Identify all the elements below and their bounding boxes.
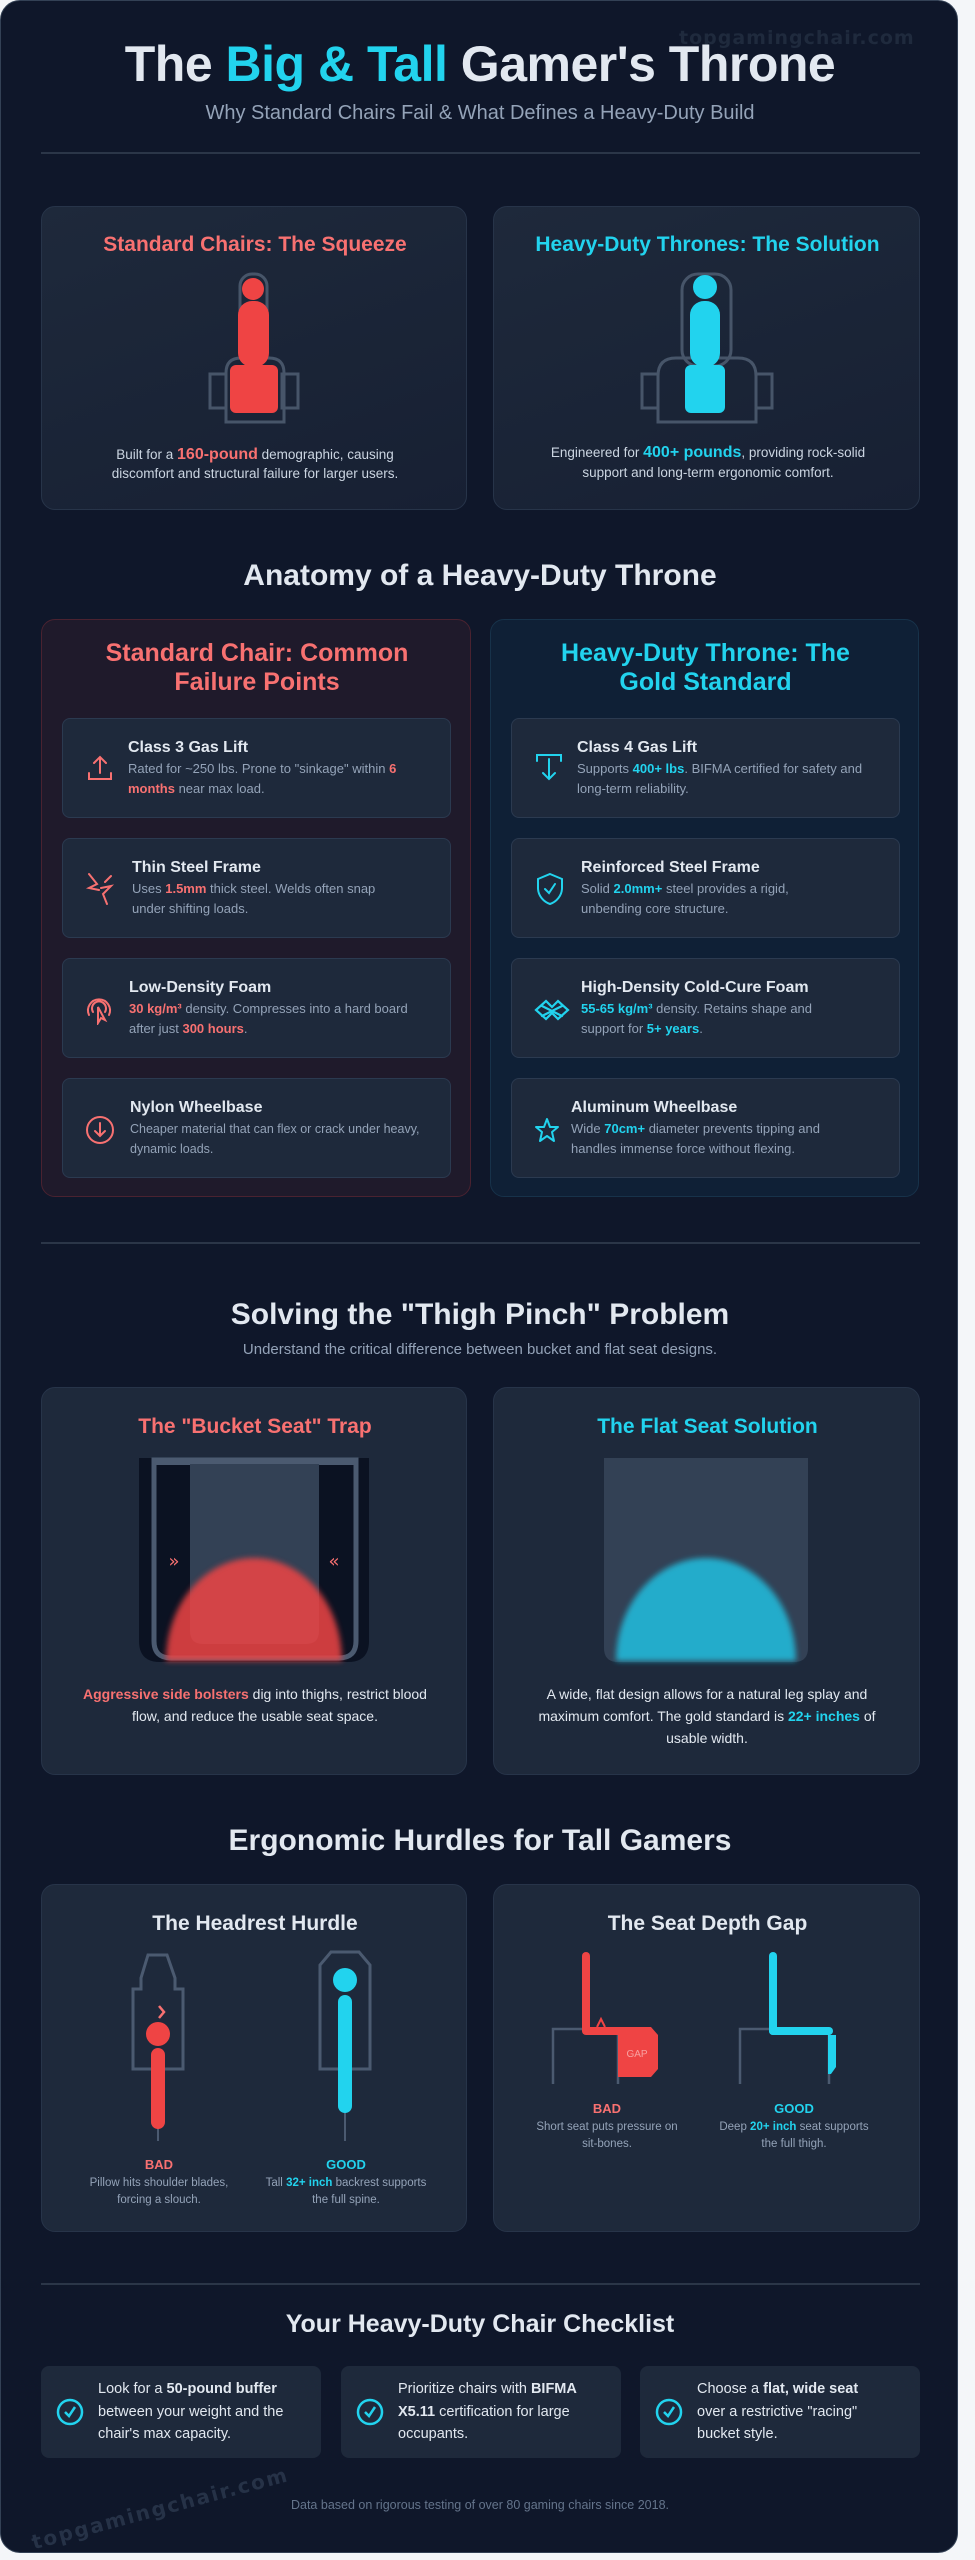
label: bad: BAD bbox=[593, 2101, 621, 2116]
item: low density foam bbox=[62, 958, 451, 1058]
heading: Gold Standard bbox=[619, 668, 792, 696]
checklist item 1 bbox=[41, 2366, 321, 2458]
item: reinforced steel frame bbox=[511, 838, 900, 938]
checklist item 3 bbox=[640, 2366, 920, 2458]
icon: seat depth bad vs good: GAP bbox=[626, 2049, 648, 2060]
icon: arrow down bbox=[536, 754, 562, 780]
panel: headrest hurdle bbox=[41, 1884, 467, 2232]
icon: broken lightning bbox=[86, 873, 114, 905]
checklist item 2: Prioritize chairs with BIFMA X5.11 certification for large occupants. bbox=[398, 2381, 576, 2442]
footer note: Data based on rigorous testing of over 80 gaming chairs since 2018. bbox=[291, 2498, 669, 2512]
text: Built for a 160-pound demographic, causing discomfort and structural failure for larger users. bbox=[112, 446, 398, 481]
checklist item 2 bbox=[341, 2366, 621, 2458]
item: low density foam: Low-Density Foam bbox=[129, 979, 271, 996]
heading bbox=[561, 639, 850, 696]
panel: heavy-duty gold standard bbox=[490, 619, 919, 1197]
item: high density foam: 55-65 kg/m³ density. Retains shape and support for 5+ years. bbox=[581, 1001, 812, 1036]
label: good: Deep 20+ inch seat supports the full thigh. bbox=[719, 2121, 869, 2150]
item: nylon wheelbase: Cheaper material that can flex or crack under heavy, dynamic loads. bbox=[130, 1122, 420, 1156]
checklist item 1: Look for a 50-pound buffer between your weight and the chair's max capacity. bbox=[98, 2381, 283, 2442]
item: reinforced steel frame: Solid 2.0mm+ steel provides a rigid, unbending core structure. bbox=[581, 881, 789, 916]
heading: The "Bucket Seat" Trap bbox=[138, 1415, 372, 1438]
label: good: Tall 32+ inch backrest supports the full spine. bbox=[266, 2177, 426, 2206]
heading: ergonomic hurdles: Ergonomic Hurdles for Tall Gamers bbox=[229, 1824, 731, 1857]
item: aluminum wheelbase: Wide 70cm+ diameter prevents tipping and handles immense force without flexing. bbox=[571, 1121, 820, 1156]
item: class 3 gas lift: Class 3 Gas Lift bbox=[128, 739, 248, 756]
icon: big chair with user bbox=[640, 272, 774, 424]
text: A wide, flat design allows for a natural leg splay and maximum comfort. The gold standard is 22+ inches of usable width. bbox=[538, 1686, 876, 1746]
icon: shield bbox=[537, 872, 563, 905]
item: class 4 gas lift bbox=[511, 718, 900, 818]
icon: star bbox=[535, 1118, 559, 1142]
heading: Standard Chairs: The Squeeze bbox=[103, 233, 407, 256]
panel: standard failure points bbox=[41, 619, 471, 1197]
label: bad bbox=[536, 2101, 678, 2150]
item: high density foam bbox=[511, 958, 900, 1058]
item: thin steel frame bbox=[62, 838, 451, 938]
item: class 4 gas lift: Class 4 Gas Lift bbox=[577, 739, 697, 756]
chart: flat seat diagram bbox=[604, 1458, 808, 1666]
label: bad: BAD bbox=[145, 2157, 173, 2172]
icon: headrest bad vs good bbox=[132, 1950, 372, 2141]
panel: standard chairs squeeze bbox=[41, 206, 467, 510]
label: good: GOOD bbox=[774, 2101, 814, 2116]
heading: Standard Chair: Common bbox=[106, 639, 408, 667]
watermark top: topgamingchair.com bbox=[679, 27, 915, 49]
subtitle: Why Standard Chairs Fail & What Defines a Heavy-Duty Build bbox=[205, 102, 755, 124]
panel: heavy-duty solution bbox=[493, 206, 920, 510]
heading: anatomy: Anatomy of a Heavy-Duty Throne bbox=[243, 559, 717, 592]
label: bad: Pillow hits shoulder blades, forcing a slouch. bbox=[90, 2177, 228, 2206]
heading: Heavy-Duty Throne: The bbox=[561, 639, 850, 667]
label: bad: Short seat puts pressure on sit-bones. bbox=[536, 2121, 678, 2150]
panel: seat depth gap bbox=[493, 1884, 920, 2232]
panel: bucket seat bbox=[41, 1387, 467, 1775]
heading: checklist: Your Heavy-Duty Chair Checklist bbox=[286, 2310, 674, 2338]
label: good bbox=[266, 2157, 426, 2206]
item: class 3 gas lift: Rated for ~250 lbs. Prone to "sinkage" within 6 months near max load. bbox=[128, 761, 396, 796]
heading: The Flat Seat Solution bbox=[597, 1415, 818, 1438]
item: class 4 gas lift: Supports 400+ lbs. BIFMA certified for safety and long-term reliability. bbox=[577, 761, 862, 796]
watermark bottom: topgamingchair.com bbox=[29, 2462, 291, 2553]
icon: pointer bbox=[86, 998, 112, 1025]
item: aluminum wheelbase: Aluminum Wheelbase bbox=[571, 1099, 737, 1116]
item: class 3 gas lift bbox=[62, 718, 451, 818]
heading: The Headrest Hurdle bbox=[152, 1912, 358, 1935]
icon: arrow up bbox=[88, 756, 112, 780]
panel: flat seat bbox=[493, 1387, 920, 1775]
heading: The Seat Depth Gap bbox=[608, 1912, 807, 1935]
icon: layers bbox=[534, 1000, 570, 1020]
text: Aggressive side bolsters dig into thighs, restrict blood flow, and reduce the usable seat space. bbox=[83, 1686, 427, 1724]
heading: thigh pinch: Solving the "Thigh Pinch" Problem bbox=[231, 1298, 729, 1331]
chart: bucket seat diagram bbox=[139, 1458, 369, 1666]
chart: bucket seat diagram: « bbox=[328, 1551, 340, 1572]
heading: Failure Points bbox=[174, 668, 340, 696]
subheading: Understand the critical difference between bucket and flat seat designs. bbox=[243, 1341, 717, 1358]
item: reinforced steel frame: Reinforced Steel Frame bbox=[581, 859, 760, 876]
item: thin steel frame: Thin Steel Frame bbox=[132, 859, 261, 876]
item: thin steel frame: Uses 1.5mm thick steel. Welds often snap under shifting loads. bbox=[132, 881, 375, 916]
chart: bucket seat diagram: » bbox=[168, 1551, 180, 1572]
icon: circle down bbox=[86, 1116, 114, 1144]
label: good bbox=[719, 2101, 869, 2150]
label: bad bbox=[90, 2157, 228, 2206]
title: The Big & Tall Gamer's Throne bbox=[125, 36, 835, 92]
item: nylon wheelbase bbox=[62, 1078, 451, 1178]
heading bbox=[106, 639, 408, 696]
icon: seat depth bad vs good bbox=[552, 1952, 836, 2084]
item: high density foam: High-Density Cold-Cure Foam bbox=[581, 979, 809, 996]
item: aluminum wheelbase bbox=[511, 1078, 900, 1178]
checklist item 3: Choose a flat, wide seat over a restrictive "racing" bucket style. bbox=[697, 2381, 858, 2442]
item: nylon wheelbase: Nylon Wheelbase bbox=[130, 1099, 262, 1116]
icon: small chair with large user bbox=[208, 272, 300, 424]
text: Engineered for 400+ pounds, providing rock-solid support and long-term ergonomic comfort. bbox=[551, 444, 865, 480]
heading: Heavy-Duty Thrones: The Solution bbox=[535, 233, 880, 256]
item: low density foam: 30 kg/m³ density. Compresses into a hard board after just 300 hours. bbox=[129, 1001, 408, 1036]
label: good: GOOD bbox=[326, 2157, 366, 2172]
